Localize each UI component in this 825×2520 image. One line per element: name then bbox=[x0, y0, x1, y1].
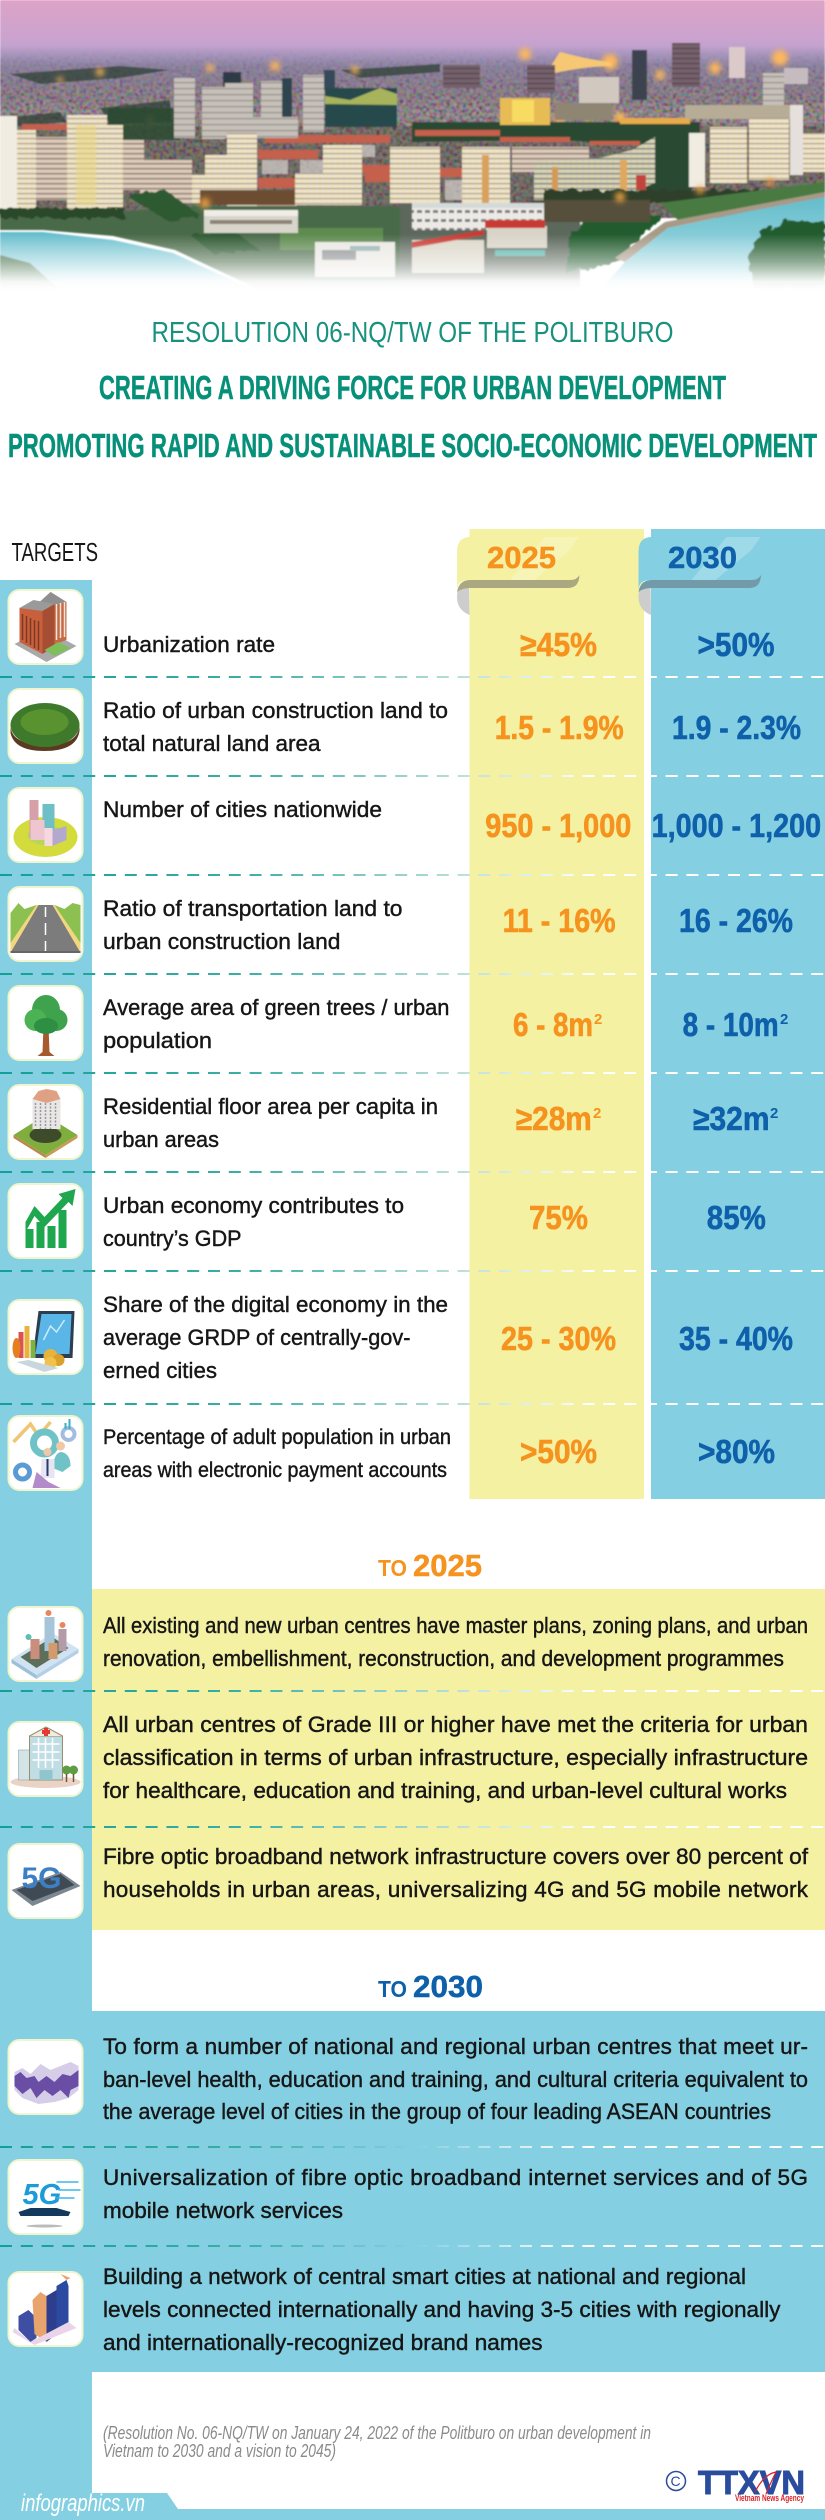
value 2025: 1.5 - 1.9% bbox=[495, 709, 624, 746]
heading: to 2025: 2025 bbox=[413, 1548, 482, 1583]
heading: to 2030 bbox=[378, 1969, 483, 2004]
text: Universalization of fibre optic broadband internet services and of 5G bbox=[103, 2165, 808, 2190]
brand: infographics.vn: infographics.vn bbox=[21, 2490, 145, 2517]
icon: tablet with city map bbox=[8, 1607, 82, 1681]
value 2025: 25 - 30% bbox=[501, 1320, 616, 1357]
column 2030 bbox=[651, 529, 825, 1499]
label bbox=[103, 1193, 404, 1251]
row: digital economy bbox=[8, 1292, 793, 1383]
icon: phone with 5G: 5G bbox=[22, 1862, 62, 1895]
text: renovation, embellishment, reconstruction, and development programmes bbox=[103, 1646, 784, 1671]
value 2025: 11 - 16% bbox=[503, 902, 616, 939]
icon: road bbox=[8, 887, 82, 961]
label: country’s GDP bbox=[103, 1226, 242, 1251]
value 2030: ≥32m bbox=[693, 1100, 770, 1137]
value 2025: 75% bbox=[529, 1199, 588, 1236]
item: national and regional centres bbox=[8, 2034, 808, 2124]
text bbox=[103, 1844, 809, 1902]
text: Building a network of central smart cities at national and regional bbox=[103, 2264, 746, 2289]
ribbon: 2025: 2025 bbox=[487, 540, 556, 575]
section 2030 panel bbox=[0, 2011, 825, 2372]
ribbon: 2025 bbox=[457, 537, 580, 615]
icon: tower on green plot bbox=[8, 1085, 82, 1159]
text bbox=[103, 1613, 808, 1671]
icon: blue smart towers bbox=[8, 2272, 82, 2346]
row: urban construction land ratio bbox=[8, 689, 801, 763]
heading: to 2030: 2030 bbox=[413, 1969, 483, 2004]
text bbox=[103, 2165, 808, 2223]
heading: to 2025 bbox=[378, 1548, 482, 1583]
label: population bbox=[103, 1028, 212, 1053]
text: Fibre optic broadband network infrastructure covers over 80 percent of bbox=[103, 1844, 809, 1869]
text: All urban centres of Grade III or higher have met the criteria for urban bbox=[103, 1712, 808, 1737]
row: urbanization rate bbox=[8, 590, 774, 664]
row: electronic payment accounts bbox=[8, 1416, 775, 1490]
label: urban construction land bbox=[103, 929, 340, 954]
hero photo: city skyline with river bbox=[0, 0, 825, 290]
label: Average area of green trees / urban bbox=[103, 995, 450, 1020]
icon: purple city bbox=[8, 2040, 82, 2114]
item: master plans bbox=[8, 1607, 808, 1681]
row: transportation land bbox=[8, 887, 793, 961]
left blue column bbox=[0, 580, 92, 2520]
section 2025 panel bbox=[92, 1589, 825, 1930]
text: and internationally-recognized brand names bbox=[103, 2330, 542, 2355]
value 2025: ≥45% bbox=[520, 626, 597, 663]
text bbox=[103, 1712, 808, 1803]
label: Ratio of urban construction land to bbox=[103, 698, 448, 723]
label: Residential floor area per capita in bbox=[103, 1094, 438, 1119]
label: average GRDP of centrally-gov- bbox=[103, 1325, 410, 1350]
icon: hospital bbox=[8, 1722, 82, 1796]
icon: green bar chart with arrow bbox=[8, 1184, 82, 1258]
text bbox=[103, 2034, 808, 2124]
value 2030: 35 - 40% bbox=[679, 1320, 793, 1357]
value 2025: ≥28m bbox=[516, 1100, 592, 1137]
value 2025: 6 - 8m bbox=[513, 1006, 593, 1043]
text: mobile network services bbox=[103, 2198, 343, 2223]
row: residential floor area bbox=[8, 1085, 778, 1159]
icon: 5G with car: 5G bbox=[22, 2179, 61, 2211]
heading: to 2025: TO bbox=[378, 1555, 407, 1581]
title block bbox=[8, 317, 817, 465]
icon: grass patch bbox=[8, 689, 82, 763]
ribbon: 2030: 2030 bbox=[668, 540, 737, 575]
label: Share of the digital economy in the bbox=[103, 1292, 448, 1317]
label bbox=[103, 1094, 438, 1152]
label: areas with electronic payment accounts bbox=[103, 1459, 447, 1482]
row: green trees bbox=[8, 986, 788, 1060]
value 2030: 2 bbox=[780, 1011, 788, 1028]
label: Urban economy contributes to bbox=[103, 1193, 404, 1218]
icon: tree bbox=[8, 986, 82, 1060]
value 2030: 85% bbox=[707, 1199, 766, 1236]
value 2025: 950 - 1,000 bbox=[485, 807, 631, 844]
label bbox=[103, 995, 450, 1053]
text: for healthcare, education and training, and urban-level cultural works bbox=[103, 1778, 787, 1803]
item: fibre optic coverage bbox=[8, 1844, 809, 1918]
value 2030: >80% bbox=[698, 1433, 775, 1470]
source note: (Resolution No. 06-NQ/TW on January 24, 2022 of the Politburo on urban development in bbox=[103, 2423, 651, 2443]
text: ban-level health, education and training, and cultural criteria equivalent to bbox=[103, 2067, 808, 2092]
text: the average level of cities in the group of four leading ASEAN countries bbox=[103, 2099, 771, 2124]
label bbox=[103, 896, 402, 954]
icon: gears and people bbox=[8, 1416, 82, 1490]
heading: to 2030: TO bbox=[378, 1976, 407, 2002]
label: Ratio of transportation land to bbox=[103, 896, 402, 921]
tree line and banks bbox=[0, 178, 825, 290]
icon: brown apartment towers bbox=[8, 590, 82, 664]
logo: TTXVN: TTXVN bbox=[698, 2464, 805, 2501]
value 2025: >50% bbox=[520, 1433, 597, 1470]
value 2025: 2 bbox=[593, 1105, 601, 1122]
text: To form a number of national and regional urban centres that meet ur- bbox=[103, 2034, 808, 2059]
text: levels connected internationally and having 3-5 cities with regionally bbox=[103, 2297, 781, 2322]
footer strip bbox=[0, 2372, 825, 2520]
label bbox=[103, 698, 448, 756]
value 2030: 2 bbox=[770, 1105, 778, 1122]
far towers bbox=[174, 43, 808, 139]
label bbox=[103, 1292, 448, 1383]
ribbon: 2030 bbox=[638, 537, 761, 615]
label: erned cities bbox=[103, 1358, 217, 1383]
source note: Vietnam to 2030 and a vision to 2045) bbox=[103, 2441, 336, 2461]
heading: targets: TARGETS bbox=[12, 539, 98, 567]
value 2030: 16 - 26% bbox=[679, 902, 793, 939]
label bbox=[103, 1426, 451, 1482]
item: universal 5G bbox=[8, 2160, 808, 2234]
row: urban economy GDP bbox=[8, 1184, 766, 1258]
value 2025: 2 bbox=[594, 1011, 602, 1028]
column 2025 bbox=[470, 529, 644, 1499]
label: urban areas bbox=[103, 1127, 219, 1152]
icon: tablet with bars and coins bbox=[8, 1300, 82, 1374]
row: number of cities bbox=[8, 788, 821, 862]
value 2030: 1.9 - 2.3% bbox=[672, 709, 801, 746]
icon: phone with 5G bbox=[8, 1844, 82, 1918]
item: smart cities bbox=[8, 2264, 781, 2355]
logo: TTXVN: C bbox=[670, 2473, 681, 2489]
label: Urbanization rate bbox=[103, 632, 275, 657]
value 2030: >50% bbox=[698, 626, 774, 663]
label: Number of cities nationwide bbox=[103, 797, 382, 822]
front buildings bbox=[0, 105, 825, 210]
text: households in urban areas, universalizing 4G and 5G mobile network bbox=[103, 1877, 809, 1902]
subtitle: RESOLUTION 06-NQ/TW OF THE POLITBURO bbox=[152, 317, 674, 349]
text: classification in terms of urban infrastructure, especially infrastructure bbox=[103, 1745, 808, 1770]
label: Percentage of adult population in urban bbox=[103, 1426, 451, 1449]
value 2030: 8 - 10m bbox=[683, 1006, 779, 1043]
icon: 5G with car bbox=[8, 2160, 82, 2234]
text bbox=[103, 2264, 781, 2355]
label: total natural land area bbox=[103, 731, 321, 756]
source note bbox=[103, 2423, 651, 2461]
icon: city on green disc bbox=[8, 788, 82, 862]
item: urban infrastructure bbox=[8, 1712, 808, 1803]
low front buildings bbox=[204, 203, 547, 277]
